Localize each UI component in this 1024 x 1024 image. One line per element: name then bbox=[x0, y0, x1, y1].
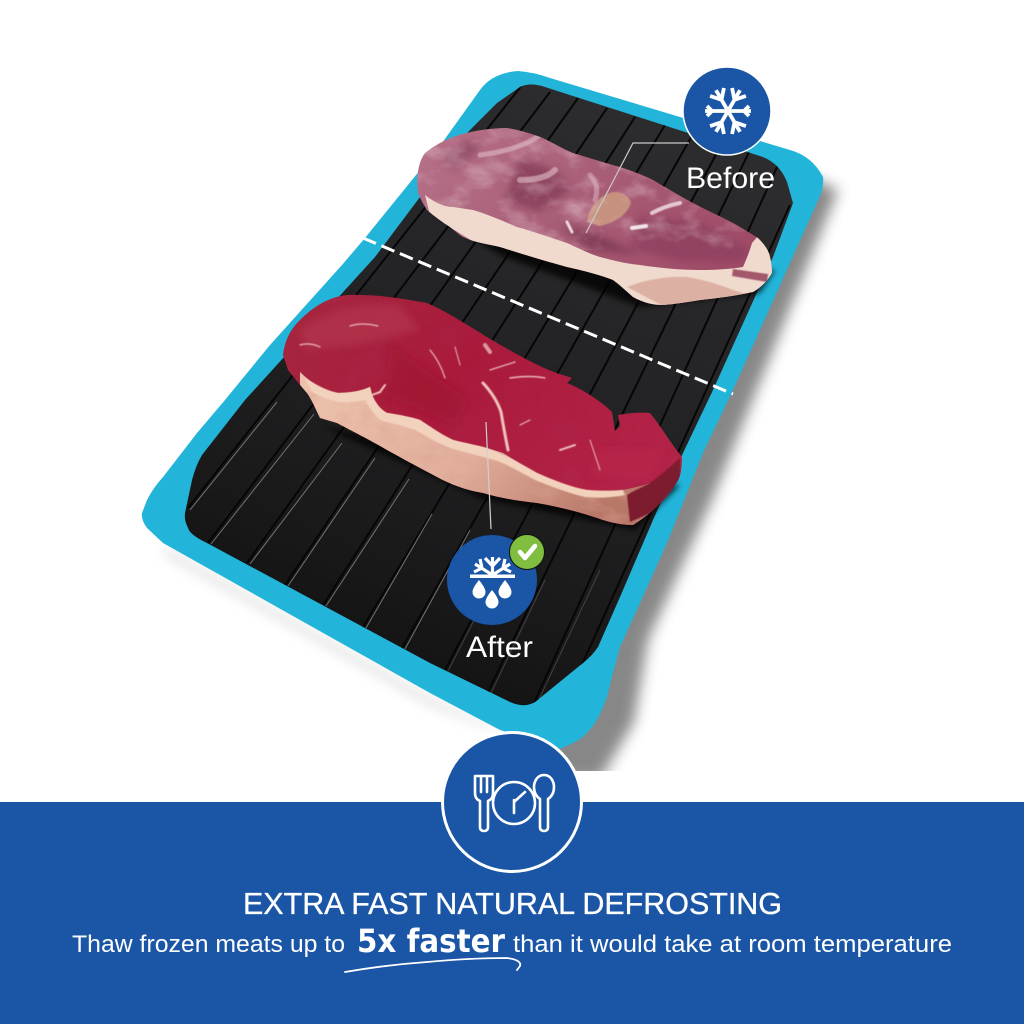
tray: blue silicone rim bbox=[142, 71, 823, 749]
frost streaks bbox=[480, 135, 680, 232]
cream seam of fat bbox=[305, 378, 625, 498]
banner heading: EXTRA FAST NATURAL DEFROSTING bbox=[243, 887, 782, 921]
icon: fork bbox=[475, 776, 493, 831]
icon: thawing snowflake with drops bbox=[470, 557, 515, 608]
dashed divider line bbox=[363, 238, 733, 394]
leader line: before bbox=[586, 143, 689, 233]
tray: black defrosting plate bbox=[184, 84, 793, 706]
icon badge: fork, clock plate and spoon bbox=[442, 732, 582, 872]
fat band bbox=[300, 372, 654, 525]
banner description: Thaw frozen meats up to bbox=[72, 931, 345, 958]
fat mottling bbox=[309, 392, 629, 522]
icon: snowflake bbox=[705, 86, 751, 136]
shaded lean areas bbox=[302, 305, 467, 423]
steak: frozen, before bbox=[410, 120, 780, 310]
icon: spoon bbox=[534, 775, 554, 831]
steak: thawed, after bbox=[283, 294, 682, 530]
marbling bbox=[300, 324, 600, 470]
tan thawed patch bbox=[587, 192, 631, 226]
badge: after bbox=[447, 534, 544, 625]
banner description: 5x faster bbox=[357, 922, 505, 960]
frozen fat edge bbox=[425, 195, 776, 310]
banner description bbox=[72, 922, 952, 960]
dark side of the tail bbox=[627, 458, 680, 522]
banner description: than it would take at room temperature bbox=[513, 931, 952, 958]
label: after: After bbox=[466, 631, 533, 664]
hand-drawn underline bbox=[345, 958, 520, 972]
bottom banner bbox=[0, 802, 1024, 1024]
drop shadow of the tray bbox=[165, 175, 838, 780]
icon: clock plate bbox=[493, 782, 535, 824]
leader line: after bbox=[486, 422, 491, 529]
badge: before bbox=[683, 67, 771, 155]
plate ridges bbox=[188, 85, 790, 712]
label: before: Before bbox=[686, 162, 775, 195]
icon: green check bbox=[510, 534, 544, 570]
darker lean areas bbox=[440, 138, 748, 262]
